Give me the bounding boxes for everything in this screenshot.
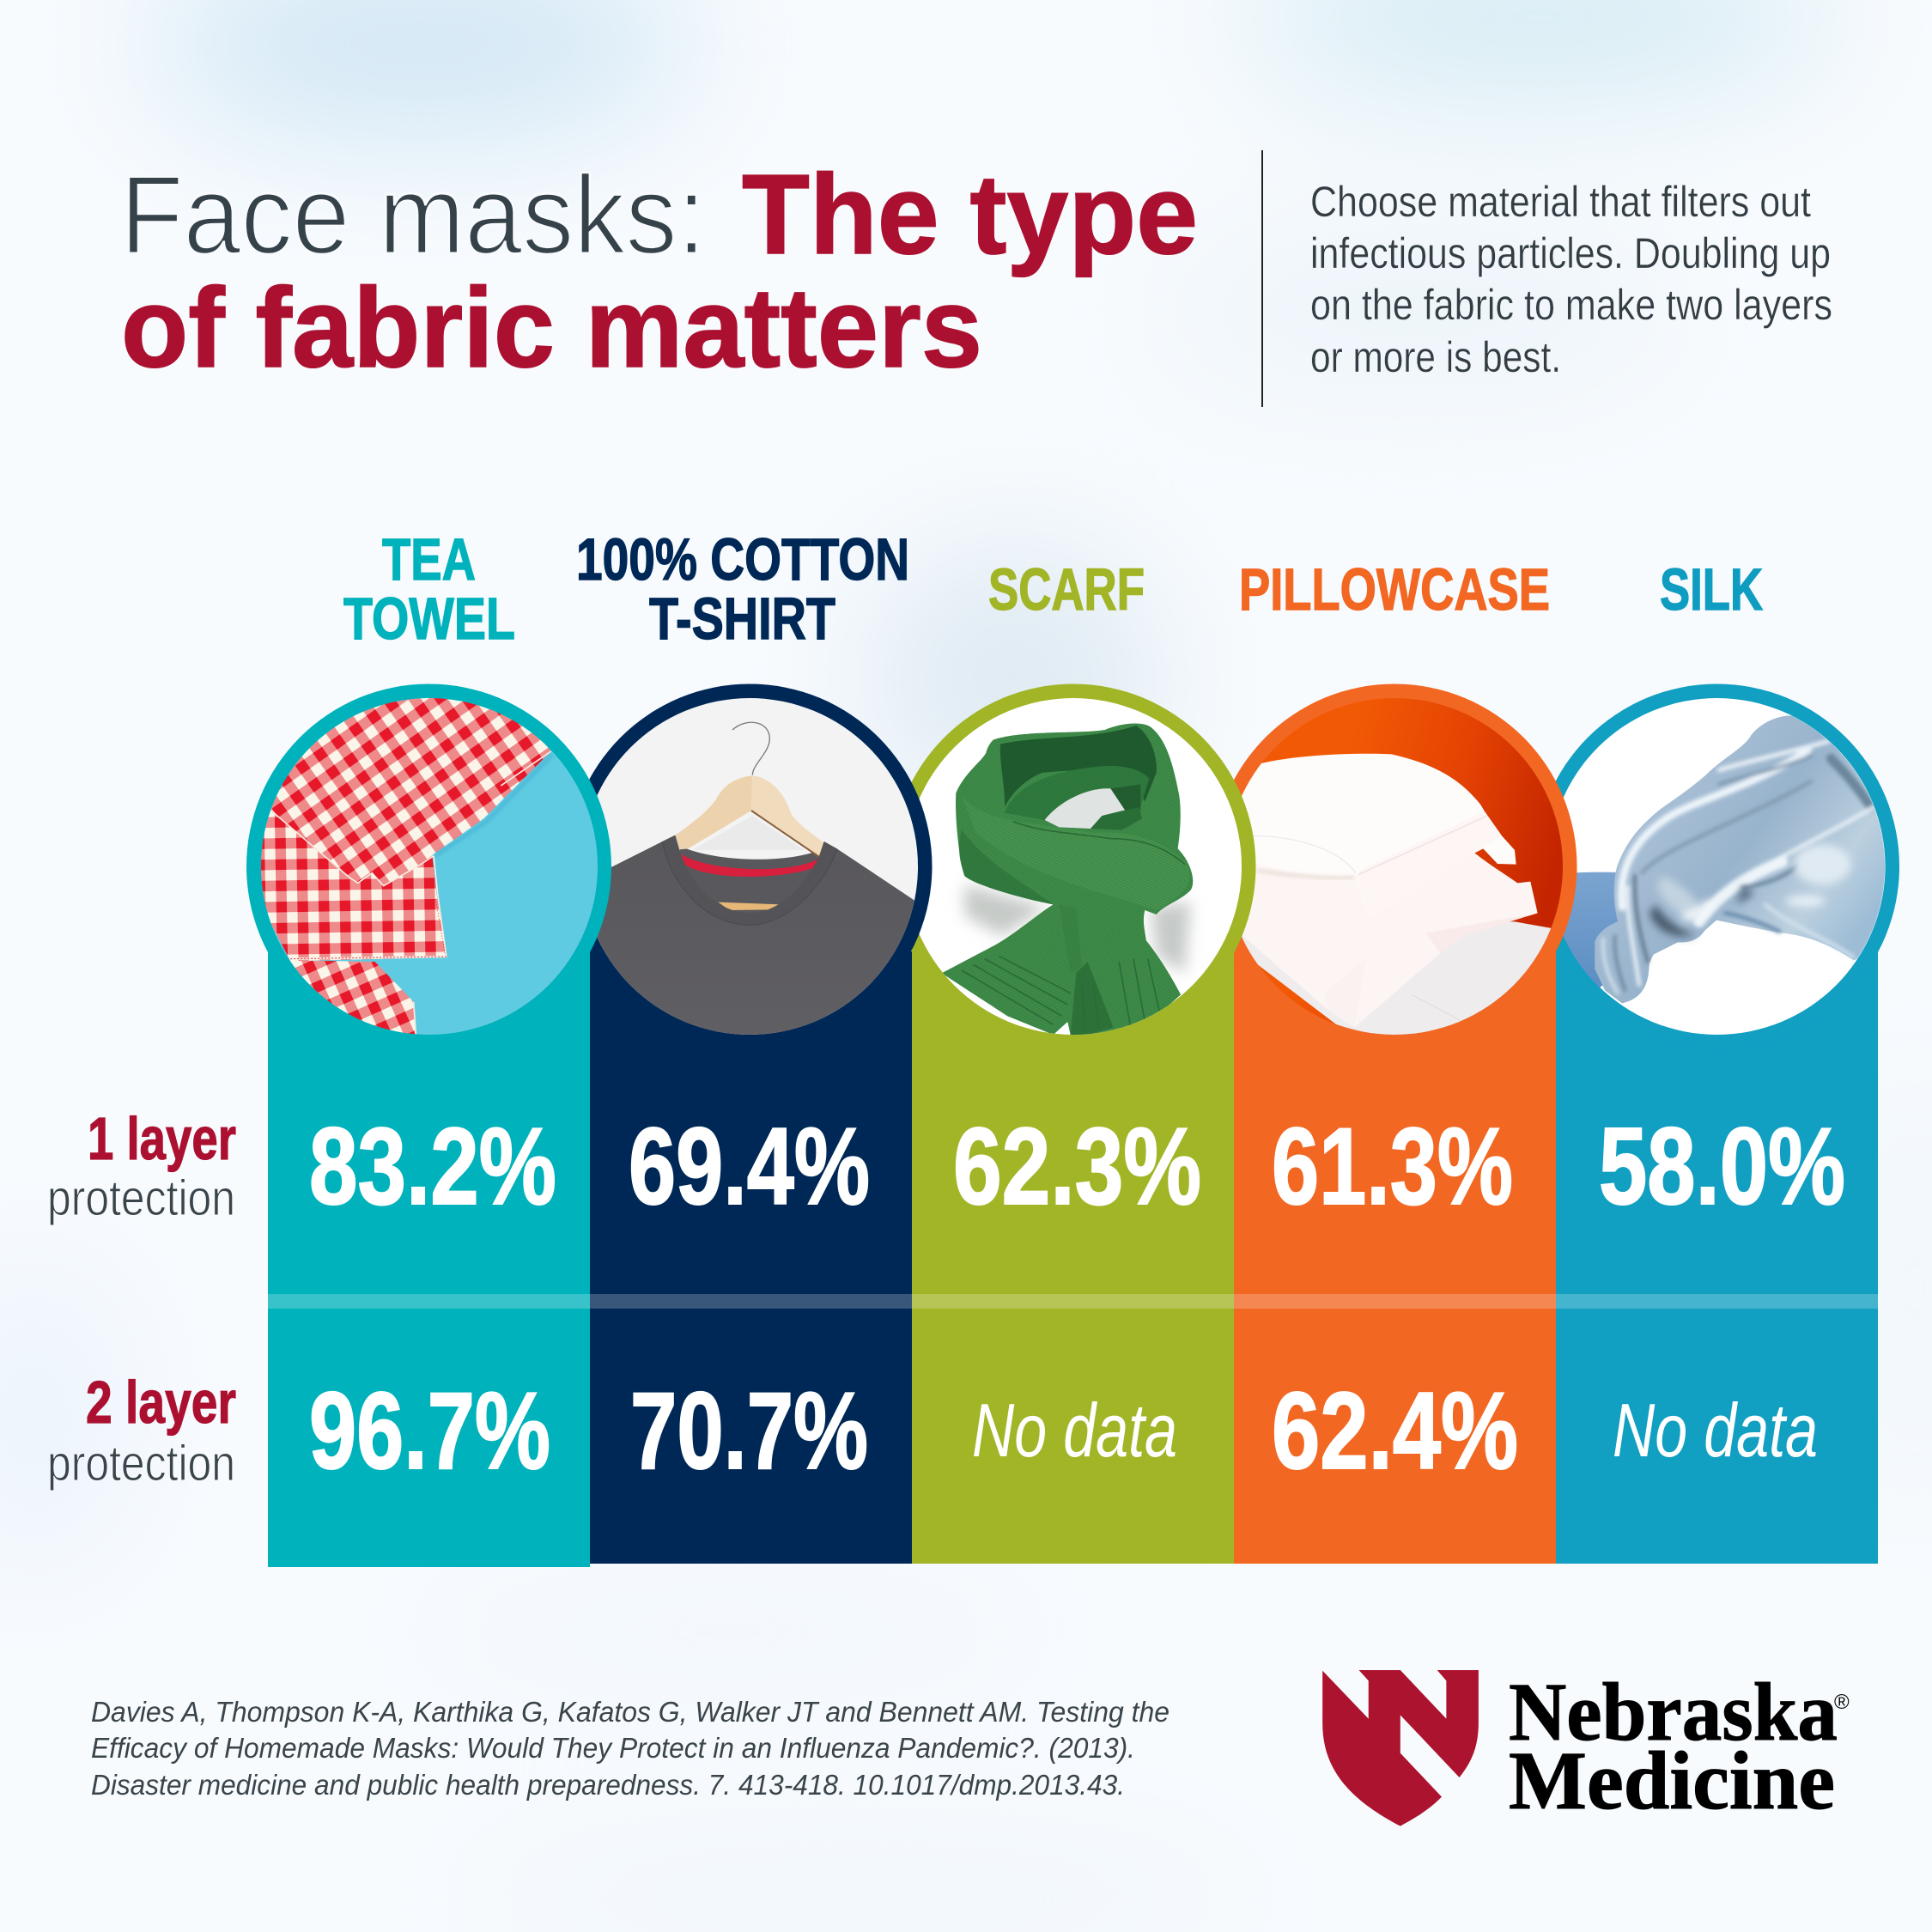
heading: tea towel: [343, 526, 515, 652]
panel: cotton t-shirt column: [567, 683, 933, 1564]
two layer values: 62.4%: [1272, 1370, 1518, 1492]
title bold part, line two: of fabric matters: [121, 264, 982, 391]
row label: 2 layer protection: 2 layer: [86, 1369, 236, 1436]
photo: red gingham towel: [249, 687, 610, 1048]
intro paragraph: on the fabric to make two layers: [1310, 281, 1832, 329]
logo wordmark: [1509, 1666, 1838, 1826]
panel: silk column: [1534, 683, 1899, 1564]
citation: [91, 1696, 1170, 1801]
two layer values: No data: [972, 1388, 1177, 1473]
heading: tea towel: TEA: [382, 526, 476, 592]
title light part: Face masks:: [120, 152, 706, 277]
intro paragraph: infectious particles. Doubling up: [1310, 229, 1831, 277]
row label: 1 layer protection: 1 layer: [88, 1105, 236, 1172]
one layer values: 69.4%: [629, 1105, 870, 1227]
title: [120, 151, 1198, 391]
fabric column headings: [343, 526, 1763, 652]
two layer values: [309, 1370, 1818, 1492]
heading: cotton t-shirt: [576, 526, 909, 652]
panel: scarf column: [891, 683, 1255, 1564]
citation: Davies A, Thompson K-A, Karthika G, Kafatos G, Walker JT and Bennett AM. Testing the: [91, 1696, 1170, 1728]
photo: green scarf: [942, 724, 1193, 1048]
icon: N shield: [1322, 1670, 1479, 1826]
title bold part, line one: The type: [742, 151, 1198, 277]
heading: silk: SILK: [1660, 556, 1763, 623]
photo: silk fabric: [1562, 715, 1888, 1003]
divider line: [1261, 150, 1263, 407]
one layer values: 61.3%: [1272, 1105, 1513, 1227]
row label: 2 layer protection: protection: [47, 1436, 235, 1492]
two layer values: 70.7%: [630, 1370, 868, 1492]
logo wordmark: Nebraska: [1509, 1666, 1838, 1758]
row label: 1 layer protection: protection: [47, 1170, 235, 1226]
citation: Efficacy of Homemade Masks: Would They Protect in an Influenza Pandemic?. (2013).: [91, 1732, 1135, 1764]
panel: pillowcase column: [1212, 683, 1577, 1564]
photo: grey t-shirt on hanger: [580, 722, 924, 1048]
citation: Disaster medicine and public health preparedness. 7. 413-418. 10.1017/dmp.2013.43.: [91, 1769, 1125, 1801]
one layer values: 62.3%: [953, 1105, 1201, 1227]
one layer values: 58.0%: [1599, 1105, 1845, 1227]
heading: cotton t-shirt: T-SHIRT: [649, 586, 835, 652]
heading: cotton t-shirt: 100% COTTON: [576, 526, 909, 592]
intro paragraph: [1310, 178, 1832, 381]
logo wordmark: Medicine: [1509, 1735, 1835, 1826]
one layer values: 83.2%: [309, 1105, 556, 1227]
intro paragraph: Choose material that filters out: [1310, 178, 1811, 226]
translucent row divider: [268, 1294, 1878, 1309]
row label: 2 layer protection: [47, 1369, 236, 1492]
registered mark: ®: [1834, 1691, 1850, 1714]
heading: scarf: SCARF: [988, 556, 1145, 623]
heading: pillowcase: PILLOWCASE: [1239, 556, 1550, 623]
two layer values: 96.7%: [309, 1370, 550, 1492]
photo: white pillows: [1242, 698, 1563, 1035]
panel: tea towel column: [246, 683, 611, 1567]
intro paragraph: or more is best.: [1310, 333, 1561, 381]
two layer values: No data: [1613, 1388, 1818, 1473]
heading: tea towel: TOWEL: [343, 586, 515, 652]
logo: Nebraska Medicine: [1322, 1666, 1850, 1826]
one layer values: [309, 1105, 1845, 1227]
row label: 1 layer protection: [47, 1105, 236, 1226]
